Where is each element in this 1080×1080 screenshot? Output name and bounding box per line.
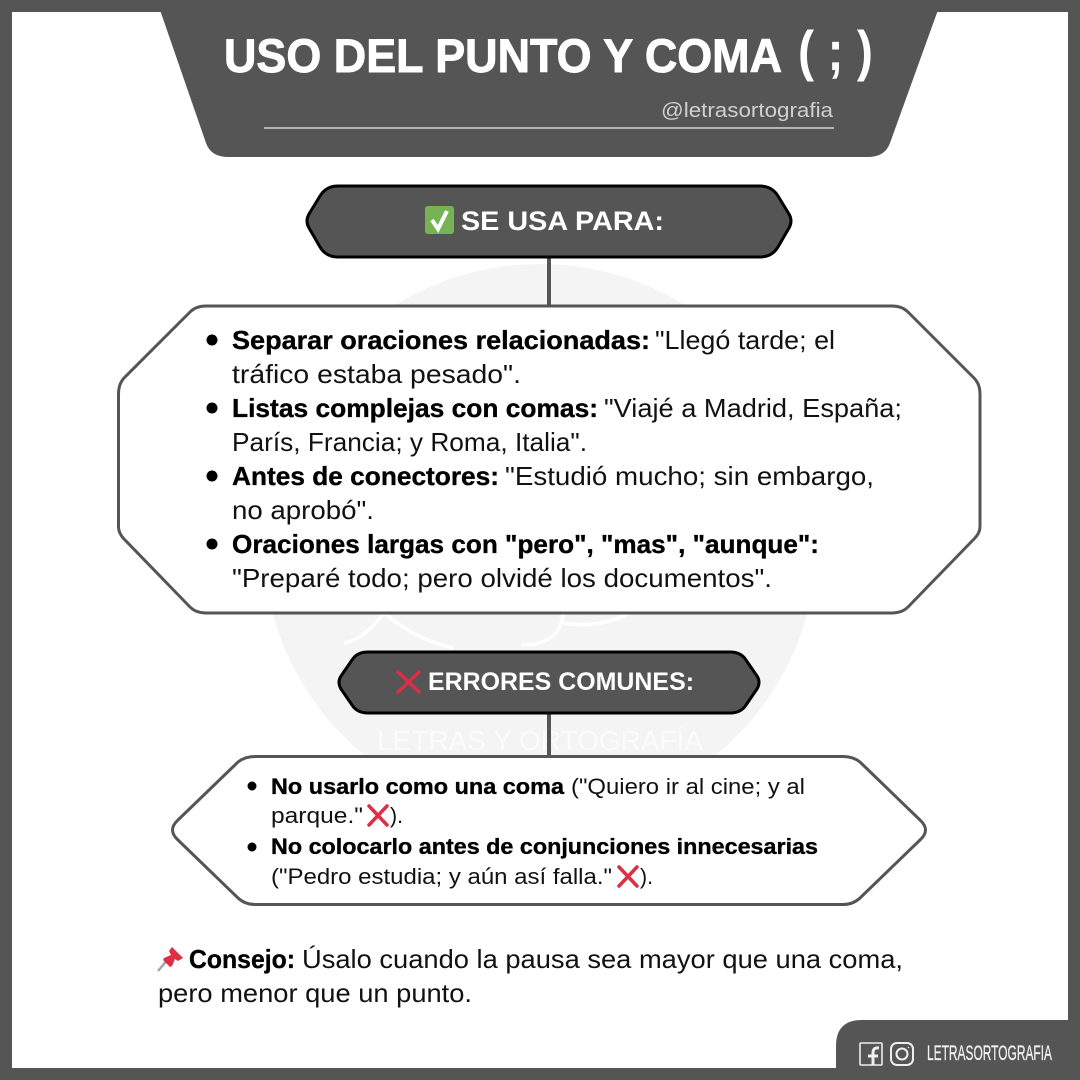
icon: red cross	[619, 867, 637, 886]
icon: pushpin	[158, 947, 183, 971]
connector: errores	[547, 713, 551, 757]
tip text: Consejo:	[189, 944, 295, 974]
bullet list: usos: tráfico estaba pesado".	[232, 359, 521, 389]
bullet list: errores: ).	[640, 864, 653, 889]
bullet list: errores	[248, 774, 818, 889]
handle: @letrasortografia	[661, 100, 834, 122]
bullet list: usos: no aprobó".	[232, 495, 374, 525]
bullet list: usos: "Preparé todo; pero olvidé los documentos".	[232, 563, 772, 593]
icon: red cross	[369, 806, 387, 825]
title: USO DEL PUNTO Y COMA	[224, 29, 782, 82]
panel: errores	[172, 756, 926, 904]
bullet list: usos: "Llegó tarde; el	[655, 325, 835, 355]
bullet list: usos: Oraciones largas con "pero", "mas", "aunque":	[232, 529, 819, 559]
footer tab	[836, 1020, 1070, 1070]
bullet list: errores: parque."	[271, 803, 363, 828]
bullet list: usos: "Estudió mucho; sin embargo,	[505, 461, 874, 491]
bullet list: errores: ("Quiero ir al cine; y al	[571, 774, 805, 799]
heading pill: errores comunes	[339, 652, 759, 713]
heading pill: se usa para: SE USA PARA:	[461, 206, 664, 236]
icon: facebook	[860, 1043, 882, 1065]
icon: instagram	[891, 1043, 913, 1065]
bullet list: usos: Listas complejas con comas:	[232, 393, 598, 423]
heading pill: errores comunes: ERRORES COMUNES:	[428, 668, 694, 696]
title: ( ; )	[798, 19, 873, 82]
bullet list: errores: ("Pedro estudia; y aún así falla."	[271, 864, 612, 889]
connector: se usa para	[547, 257, 551, 307]
icon: red cross	[398, 672, 419, 692]
tip text: pero menor que un punto.	[158, 978, 472, 1008]
bullet list: usos	[206, 325, 902, 593]
bullet list: errores: No usarlo como una coma	[271, 774, 565, 799]
panel: usos	[118, 306, 980, 613]
watermark logo	[263, 264, 817, 818]
bullet list: usos: Antes de conectores:	[232, 461, 499, 491]
watermark logo: LETRAS Y ORTOGRAFÍA	[377, 725, 703, 756]
bullet list: usos: París, Francia; y Roma, Italia".	[232, 427, 587, 457]
header banner	[160, 10, 938, 157]
bullet list: usos: "Viajé a Madrid, España;	[604, 393, 902, 423]
bullet list: usos: Separar oraciones relacionadas:	[232, 325, 650, 355]
tip text: Úsalo cuando la pausa sea mayor que una coma,	[302, 944, 903, 974]
bullet list: errores: No colocarlo antes de conjunciones innecesarias	[271, 834, 818, 859]
tip text	[158, 944, 903, 1008]
icon: check mark	[425, 206, 454, 234]
bullet list: errores: ).	[390, 803, 403, 828]
heading pill: se usa para	[307, 186, 791, 257]
